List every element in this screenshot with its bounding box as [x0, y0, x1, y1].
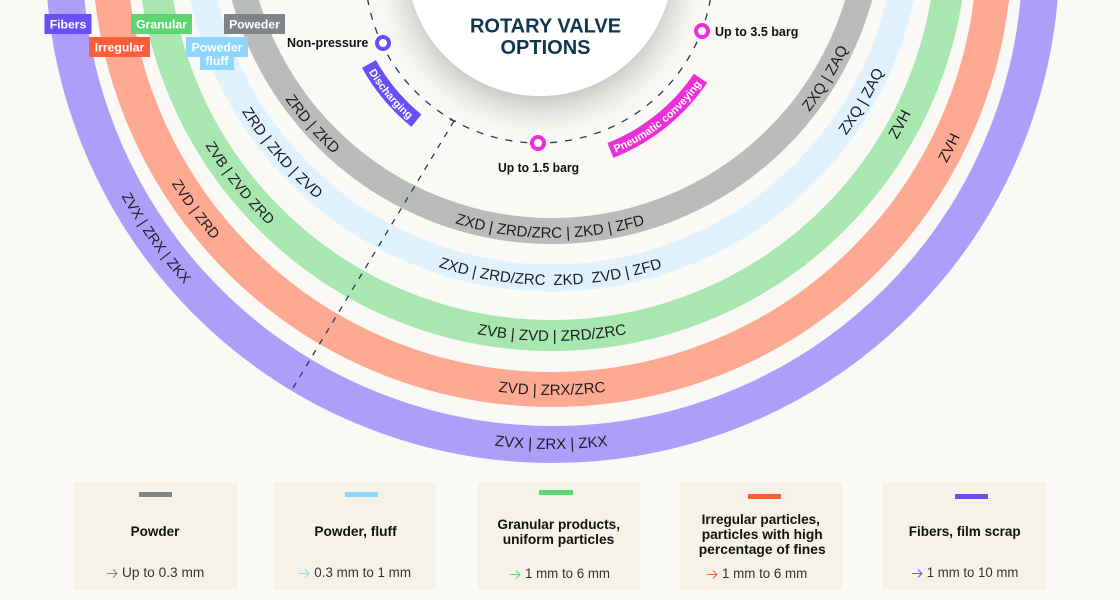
ring label: irregular right: ZVH	[938, 133, 960, 163]
card: fibers, film scrap: Fibers, film scrap	[909, 523, 1021, 539]
title: ROTARY VALVE	[470, 16, 621, 38]
ring label: irregular left: ZVD | ZRD	[172, 179, 218, 238]
card: fibers, film scrap	[883, 482, 1046, 590]
ring label: powder left: ZRD | ZKD	[286, 94, 338, 152]
ring: powder fluff	[190, 0, 914, 292]
tag: powder	[224, 14, 285, 34]
center circle with title	[407, 0, 673, 96]
card: irregular particles	[680, 482, 843, 590]
ring label: granular right: ZVH	[888, 110, 910, 140]
card: powder: Up to 0.3 mm	[122, 565, 204, 580]
ring label: powder right: ZXQ | ZAQ	[802, 46, 850, 112]
card: irregular particles: Irregular particles,	[702, 511, 820, 527]
tag: irregular	[89, 37, 150, 57]
card: granular products: Granular products,	[497, 516, 620, 532]
tag: fibers: Fibers	[50, 18, 87, 32]
badge: discharging: Discharging	[369, 68, 412, 120]
ring label: powder bottom: ZXD | ZRD/ZRC | ZKD | ZFD	[455, 214, 644, 241]
card: irregular particles: percentage of fines	[699, 541, 826, 557]
tag: irregular: Irregular	[95, 40, 144, 54]
tag: granular	[131, 14, 192, 34]
tag: granular: Granular	[136, 18, 187, 32]
ring label: fluff right: ZXQ | ZAQ	[838, 69, 886, 136]
point: non-pressure: Non-pressure	[287, 36, 368, 50]
card: powder, fluff	[273, 482, 436, 590]
center circle with title: OPTIONS	[500, 37, 591, 59]
card: granular products	[477, 482, 640, 590]
ring label: irregular bottom: ZVD | ZRX/ZRC	[498, 382, 605, 398]
ring label: fluff left: ZRD | ZKD | ZVD	[242, 106, 322, 197]
point: up to 1.5 barg: Up to 1.5 barg	[498, 161, 579, 175]
card: granular products: uniform particles	[503, 531, 614, 547]
ring: fibers	[47, 0, 1058, 463]
card: granular products: 1 mm to 6 mm	[525, 566, 610, 581]
card: powder, fluff: Powder, fluff	[314, 523, 397, 539]
tag: powder fluff	[186, 37, 248, 70]
ring label: granular left: ZVB | ZVD ZRD	[206, 140, 274, 223]
ring: granular	[142, 0, 962, 351]
badge: pneumatic conveying: Pneumatic conveying	[613, 81, 702, 152]
card: powder	[74, 482, 237, 590]
card: fibers, film scrap: 1 mm to 10 mm	[927, 565, 1018, 580]
ring: powder	[232, 0, 872, 244]
point: up to 3.5 barg: Up to 3.5 barg	[715, 25, 798, 39]
tag: powder: Poweder	[229, 18, 280, 32]
tag: fibers	[44, 14, 92, 34]
tag: powder fluff: Poweder	[192, 40, 243, 54]
badge: discharging	[362, 60, 422, 127]
dashed pressure arc	[365, 0, 713, 143]
ring label: fibers bottom: ZVX | ZRX | ZKX	[495, 435, 608, 452]
card: powder, fluff: 0.3 mm to 1 mm	[314, 565, 411, 580]
card: irregular particles: particles with high	[702, 526, 823, 542]
tag: powder fluff: fluff	[205, 54, 229, 68]
dashed leader line	[293, 120, 458, 388]
point: up to 1.5 barg	[498, 137, 579, 175]
card: irregular particles: 1 mm to 6 mm	[722, 566, 807, 581]
ring label: fluff bottom: ZXD | ZRD/ZRC ZKD ZVD | ZFD	[438, 257, 660, 285]
ring: irregular	[95, 0, 1009, 407]
card: powder: Powder	[131, 523, 180, 539]
ring label: fibers left: ZVX | ZRX | ZKX	[122, 192, 192, 284]
ring label: granular bottom: ZVB | ZVD | ZRD/ZRC	[478, 324, 626, 344]
